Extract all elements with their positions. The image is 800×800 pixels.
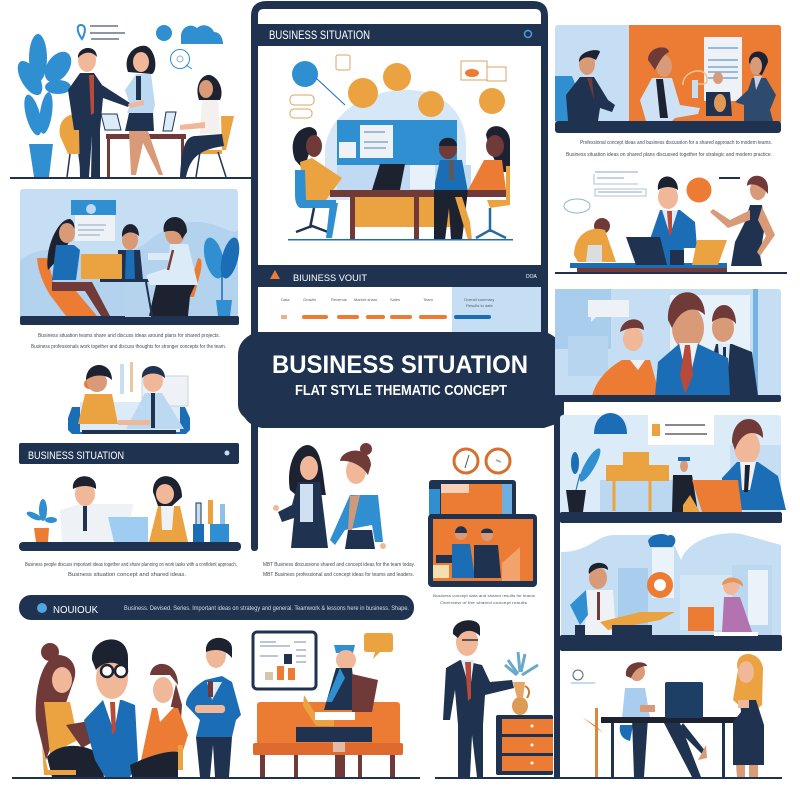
icon: plant pot [25,499,57,542]
speech note [588,300,629,322]
sofa with reader [253,645,403,777]
woman right [455,126,510,240]
text block: caption two [25,562,237,578]
panel: bottom left group [12,632,420,779]
text block: caption three: MBT Business discussions shared and concept ideas for the team today. [263,562,415,568]
navy base bar [20,316,239,325]
woman in dress [710,176,775,266]
icon: orange badge [647,572,673,598]
building tower [648,534,675,598]
frame right rail [554,400,560,778]
panel: blue suit trio [555,289,781,402]
lower stats panel: Results to date [466,303,493,308]
cabinet [496,715,553,775]
woman in skirt [125,46,163,175]
dome [325,90,466,200]
tired person [574,218,616,262]
lower stats panel: Overall summary [464,297,494,302]
icon: small doodle [571,670,595,683]
blonde woman [733,654,764,777]
background [560,415,781,515]
icon: orange badge [686,178,712,202]
icon: map pin with caption [78,25,125,40]
man in suit [68,48,130,177]
header text: BUSINESS SITUATION [269,30,370,42]
text block: caption four: Professional concept ideas and business discussion for a shared approach to modern teams. [580,140,772,146]
floor [288,239,513,240]
laptop on table [81,254,165,282]
small chart [692,80,698,98]
icon: circle badge [156,25,172,41]
woman with headset [149,476,188,542]
man in tie back [702,305,758,396]
lower stats panel: Data [281,297,290,302]
man right [146,217,198,316]
lamp [594,413,627,434]
blue screen [337,120,471,190]
shelves [120,362,188,406]
text block: caption two: Business situation concept and shared ideas. [68,572,186,578]
panel background [20,189,238,319]
text block: caption four: Business situation ideas on shared plans discussed together for strategic and modern practice. [566,152,772,158]
man with glasses [84,639,138,777]
icon: blue circle [292,61,318,87]
background [555,289,781,397]
woman in blue jacket [330,443,386,549]
woman in black suit [273,445,328,548]
floor line [12,777,420,779]
title card: BUSINESS SITUATION [272,351,528,379]
background [555,25,781,125]
woman right [735,52,776,121]
lower stats panel: Revenue [331,297,348,302]
plant [200,235,243,316]
leg figure [664,723,706,777]
laptop [692,480,742,512]
panel: two colleagues at desk [68,362,190,434]
panel: laptop office scene [560,413,786,523]
frame body [251,1,548,340]
heading bar: business situation: BUSINESS SITUATION [28,450,124,462]
woman left [293,127,342,238]
panel: team around laptop [20,189,243,325]
woman in orange [130,664,188,777]
navy base [555,395,781,402]
title card [238,333,564,428]
table with laptop [101,112,186,177]
icon: thought cloud [564,199,590,213]
laptop dark [626,237,667,265]
man centre [640,47,700,121]
sky [561,533,781,636]
laptop amber [692,240,727,265]
icon: badges [454,449,510,473]
panel: city scene [560,533,782,651]
panel: desk scene with laptop [19,476,241,551]
text block: caption one: Business professionals work together and discuss thoughts for stronger concepts for the team. [31,344,226,350]
text block: caption three [263,562,415,578]
sign board [71,200,116,241]
man with glasses in orange [592,319,660,396]
frame lower left leg [251,420,258,551]
central frame [251,1,548,340]
main white panel [258,46,541,265]
man [60,476,134,542]
upper tablet [429,480,516,516]
desk [601,717,739,777]
woman in purple [722,577,752,632]
panel: top left meeting scene [10,25,251,179]
icon: speech bubble [170,50,192,69]
panel: laptop presentation [555,172,787,274]
icon: brain outline [683,71,707,85]
man [443,620,514,777]
second header: DOA [526,274,538,280]
text block: caption two: Business people discuss important ideas together and share planning on work tasks with a confident approach. [25,562,237,568]
main man [722,419,786,510]
coat stand [582,708,603,777]
laptop [372,164,405,190]
text block: caption one: Business situation teams share and discuss ideas around plans for shared projects. [38,333,220,339]
shoe [698,745,707,760]
icon: header glyph [524,30,532,38]
lower stats panel: Market share [354,297,378,302]
lower tablet [428,514,537,587]
text block: caption three: MBT Business professional and concept ideas for teams and leaders. [263,572,414,578]
bottles [193,500,229,542]
plant [566,446,604,512]
panel: man with vase and cabinet [435,620,782,779]
man small [706,72,732,116]
connector line [316,78,345,105]
standing man [672,457,700,512]
text block: caption four [566,140,772,158]
table leg [146,282,152,316]
main man [655,292,730,396]
chairs [37,258,97,316]
title card: FLAT STYLE THEMATIC CONCEPT [295,382,507,399]
desk base [68,407,190,434]
panel: orange meeting [555,25,781,133]
lower stats panel: Sales [390,297,400,302]
icon: amber circles [348,63,505,117]
document on wall [704,37,742,101]
lower stats panel: Growth [303,297,316,302]
panel: desk and laptop conversation [571,654,764,777]
orange sign [606,452,669,511]
orange chair [60,114,80,154]
heading bar: business situation [19,443,239,464]
lower stats panel [258,287,541,332]
navy base [560,512,782,523]
man with laptop [647,176,697,265]
desk [19,542,241,551]
banner: note strip [19,595,414,620]
man centre [410,138,468,240]
wall chart [253,632,316,689]
second header: BIUINESS VOUIT [293,273,368,283]
top white strip [258,9,541,24]
panel: tablets and badges: Overview of the shared concept results [440,600,527,605]
man in blue jacket [186,638,241,777]
illustration: meeting with icons [288,55,513,240]
table [330,190,510,240]
panel: tablets and badges [428,449,537,605]
panel: two women [273,443,386,549]
caption: Business concept data and shared results for teams [433,593,535,598]
banner: note strip: Business. Devised. Series. Important ideas on strategy and general. Teamwork & lessons here in business. Shape. [124,606,409,612]
navy bar [555,121,781,133]
second header [270,270,538,283]
orange box [688,607,714,631]
seated woman [180,75,226,177]
icon: potted plant [13,34,77,177]
amber chair [196,116,234,154]
seated man [620,662,655,777]
laptop [108,517,148,542]
text block: caption one [31,333,226,350]
woman with bun [36,643,104,777]
lower stats panel: Team [423,297,433,302]
speech bubble [364,633,393,659]
note [652,424,707,436]
plant in vase [505,652,538,715]
laptop [665,682,703,718]
man [118,366,184,429]
note cards [594,172,646,196]
floor line [435,777,782,779]
floor line [10,177,251,179]
banner: note strip: NOUIOUK [53,605,98,616]
buildings [618,565,772,635]
floor line [555,272,787,274]
man in white shirt [570,563,675,636]
caption dash [719,177,740,179]
icon: cloud [181,25,223,44]
icon: document tags [290,55,506,118]
woman [78,365,118,424]
man left [555,50,615,121]
boy centre [118,224,151,317]
woman left [47,219,110,316]
navy base [560,635,782,651]
